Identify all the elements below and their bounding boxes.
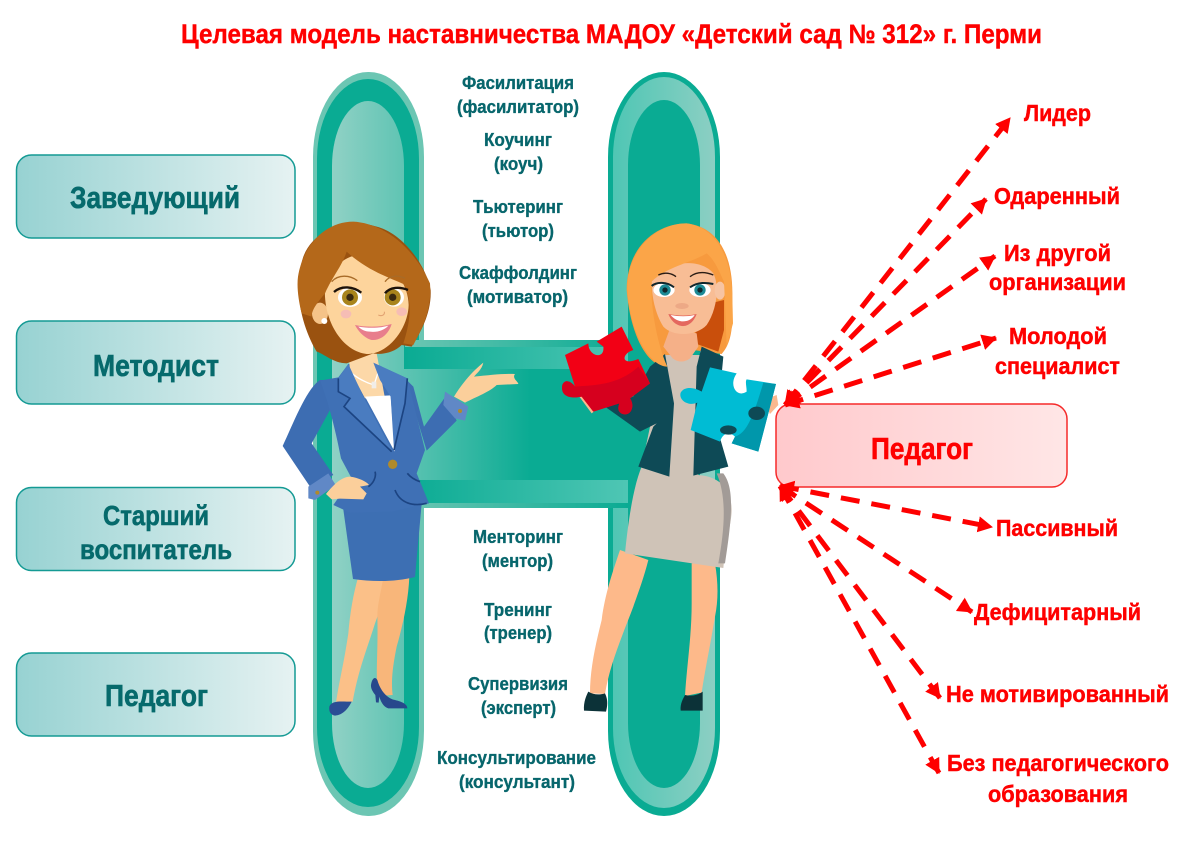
teacher type labels: Одаренный	[994, 183, 1120, 209]
legs and shoes	[329, 577, 409, 716]
left hand	[326, 477, 369, 499]
hair fringe	[298, 222, 430, 345]
teacher type labels: Дефицитарный	[974, 599, 1141, 625]
hands	[579, 392, 600, 413]
jacket right sleeve	[405, 378, 457, 451]
role box: Педагог: Педагог	[105, 679, 208, 713]
eyes	[653, 283, 675, 297]
puzzle piece: blue	[680, 367, 776, 452]
dashed arrows: upper teacher types	[785, 118, 1010, 405]
role box: Заведующий	[16, 155, 295, 238]
teacher type labels: Молодой	[1009, 323, 1107, 349]
role box: Методист	[16, 321, 295, 404]
lower mentoring forms list: (эксперт)	[481, 697, 556, 718]
hair fringe	[627, 223, 733, 367]
face	[652, 263, 717, 334]
role box: Методист: Методист	[93, 349, 219, 383]
teacher type labels: специалист	[995, 353, 1120, 379]
crossbar of H	[404, 340, 628, 508]
upper mentoring forms list: (мотиватор)	[467, 286, 568, 307]
lapel lines	[338, 378, 427, 505]
jacket torso	[320, 363, 429, 513]
right hand	[454, 363, 518, 403]
left column of H	[313, 72, 424, 816]
upper mentoring forms list: (коуч)	[494, 153, 543, 174]
ear	[715, 282, 725, 300]
dashed arrows: lower teacher types	[780, 486, 992, 773]
role box: Старший воспитатель: воспитатель	[80, 534, 232, 565]
lower mentoring forms list: (ментор)	[482, 550, 553, 571]
title: Целевая модель наставничества МАДОУ «Детский сад № 312» г. Перми	[181, 19, 1042, 49]
dress	[625, 355, 732, 568]
upper mentoring forms list: Тьютеринг	[473, 196, 563, 217]
upper mentoring forms list: (тьютор)	[482, 220, 554, 241]
jacket cuffs	[443, 392, 468, 421]
lower mentoring forms list: Супервизия	[468, 673, 568, 694]
jacket left sleeve	[283, 380, 340, 487]
hair back	[627, 223, 732, 367]
blouse	[365, 395, 395, 452]
lapels	[338, 363, 407, 452]
lower mentoring forms list: Консультирование	[437, 747, 596, 768]
lower mentoring forms list: (консультант)	[459, 771, 575, 792]
teacher type labels: Не мотивированный	[946, 681, 1169, 707]
letter H shape	[313, 72, 720, 816]
earring	[321, 318, 327, 324]
lower mentoring forms list: Тренинг	[484, 599, 552, 620]
teacher type labels: Пассивный	[996, 515, 1118, 541]
upper mentoring forms list	[457, 72, 579, 307]
illustration: woman in blue suit	[283, 222, 518, 716]
teacher type labels: организации	[989, 269, 1126, 295]
teacher type labels	[946, 100, 1169, 807]
role box: Старший воспитатель	[16, 488, 295, 570]
necklace	[352, 372, 378, 385]
role box: Старший воспитатель: Старший	[103, 500, 209, 531]
upper mentoring forms list: Скаффолдинг	[459, 262, 577, 283]
jacket	[605, 347, 728, 477]
teacher type labels: образования	[988, 781, 1128, 807]
role box: Педагог	[16, 653, 295, 736]
mouth	[355, 324, 392, 340]
teacher type labels: Лидер	[1024, 100, 1091, 126]
right column of H	[608, 72, 720, 816]
upper mentoring forms list: (фасилитатор)	[457, 96, 579, 117]
lower mentoring forms list: (тренер)	[484, 622, 552, 643]
neck	[348, 353, 385, 398]
eyes	[338, 288, 362, 307]
nose	[378, 312, 384, 316]
ear	[312, 303, 328, 324]
button	[388, 460, 397, 469]
lower mentoring forms list	[437, 526, 596, 792]
hair back	[299, 223, 431, 363]
central box: Педагог: Педагог	[871, 432, 973, 466]
cheeks	[341, 310, 351, 318]
face	[325, 255, 409, 354]
teacher type labels: Без педагогического	[947, 750, 1169, 776]
illustration: woman with puzzle pieces	[562, 223, 778, 712]
teacher type labels: Из другой	[1004, 240, 1111, 266]
skirt	[342, 500, 422, 581]
mouth	[668, 314, 697, 326]
lower mentoring forms list: Менторинг	[473, 526, 563, 547]
nose	[675, 303, 689, 309]
dress shadow	[717, 473, 731, 563]
neck	[663, 327, 698, 361]
upper mentoring forms list: Коучинг	[484, 129, 552, 150]
puzzle piece: red	[562, 327, 650, 414]
role box: Заведующий: Заведующий	[70, 181, 240, 215]
central box: Педагог	[776, 404, 1067, 487]
legs and shoes	[584, 550, 717, 712]
upper mentoring forms list: Фасилитация	[462, 72, 574, 93]
